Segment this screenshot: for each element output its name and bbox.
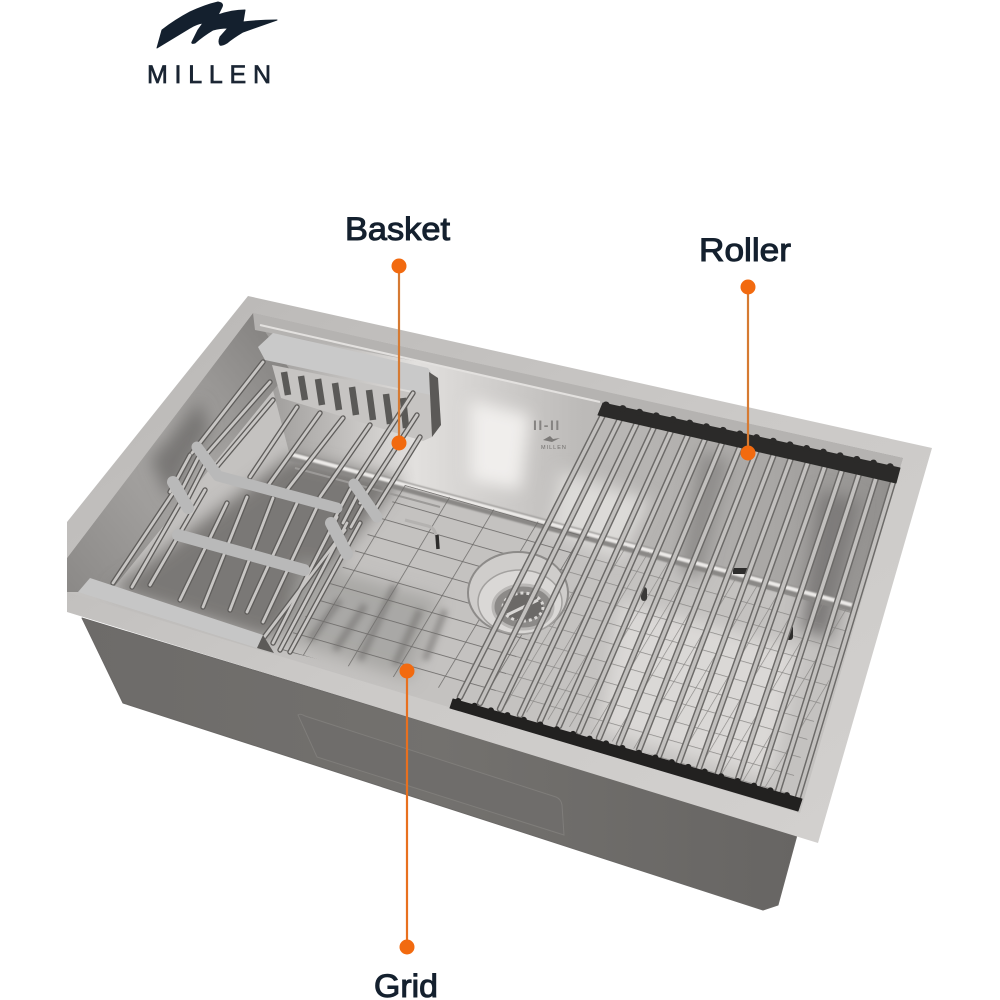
sink well	[60, 300, 920, 820]
callout: Basket: Basket	[345, 211, 450, 247]
wire grid, dense section	[490, 536, 855, 800]
callout: Roller: Roller	[699, 232, 791, 268]
basket back plate	[258, 333, 441, 441]
sink body exterior	[82, 618, 797, 910]
drain	[468, 552, 568, 634]
basket front plate	[78, 578, 274, 653]
wall logo stamp	[533, 417, 567, 451]
roller rods	[460, 415, 893, 797]
back wall	[253, 313, 903, 607]
callout: Basket	[345, 211, 450, 450]
basket	[78, 333, 441, 653]
left wall	[67, 313, 290, 592]
callout: Roller	[699, 232, 791, 460]
basket clips	[173, 447, 377, 570]
roller top black strip	[598, 403, 900, 483]
sink rim	[67, 296, 932, 843]
top ledge	[253, 313, 903, 468]
grid brackets	[405, 520, 793, 640]
logo: Millen	[147, 2, 277, 89]
wall logo stamp: MILLEN	[541, 445, 567, 451]
sink illustration	[60, 296, 932, 910]
roller bottom black strip	[450, 699, 802, 811]
reflection streaks on floor	[310, 585, 445, 665]
logo wordmark: MILLEN	[147, 61, 277, 89]
wire grid, sparse section	[280, 485, 590, 700]
wall logo stamp: II-II	[533, 417, 561, 433]
basket rods	[113, 362, 420, 652]
logo mark	[157, 2, 277, 48]
roller mat	[450, 403, 900, 811]
callout: Grid	[374, 664, 438, 1000]
back rail	[290, 456, 852, 607]
floor reflections	[110, 400, 860, 780]
